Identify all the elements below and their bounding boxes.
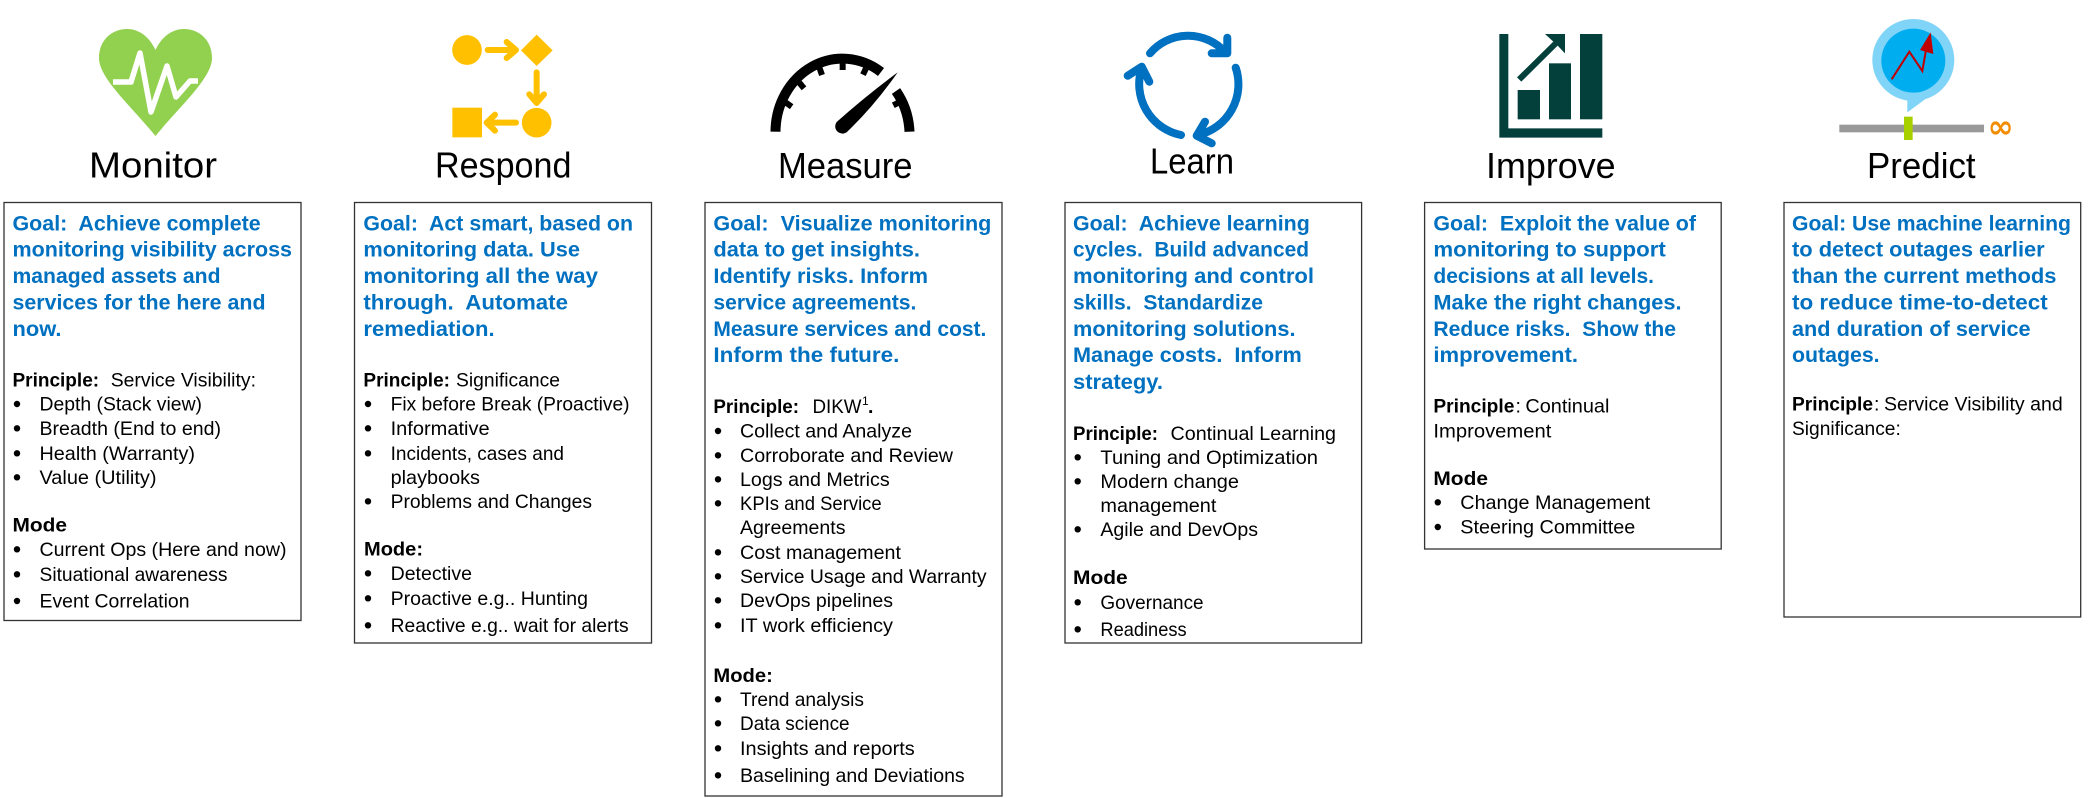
principle: Predict: Service Visibility and: [1884, 394, 2063, 416]
mode list: Learn: Mode: [1073, 567, 1128, 589]
goal text: Improve: improvement.: [1433, 344, 1578, 367]
principle: Predict: [1792, 394, 2063, 440]
goal text: Measure: Inform the future.: [713, 344, 899, 367]
principle list: Learn: management: [1100, 495, 1217, 517]
goal text: Learn: skills. Standardize: [1073, 292, 1263, 315]
icon: prediction bubble on slider: [1839, 19, 2014, 145]
heading: Improve: Improve: [1486, 145, 1616, 186]
mode list: Respond: Detective: [391, 563, 472, 585]
panel: Measure: [705, 202, 1002, 796]
principle list: Measure: IT work efficiency: [740, 615, 893, 637]
principle list: Measure: Service Usage and Warranty: [740, 566, 987, 588]
icon: circular learning arrows: [1128, 36, 1238, 143]
principle list: Respond: Significance: [456, 370, 560, 392]
heading: Measure: Measure: [778, 145, 912, 186]
goal text: Monitor: managed assets and: [12, 265, 220, 288]
heading: Respond: Respond: [435, 145, 571, 186]
principle list: Monitor: Principle:: [12, 370, 99, 392]
principle list: Measure: Principle:: [713, 396, 799, 418]
mode list: Learn: [1073, 567, 1204, 641]
principle list: Monitor: Value (Utility): [40, 467, 156, 489]
goal text: Learn: monitoring solutions.: [1073, 318, 1296, 341]
goal text: Monitor: now.: [12, 318, 61, 341]
mode list: Respond: Proactive e.g.. Hunting: [391, 588, 588, 610]
principle list: Learn: [1073, 423, 1336, 541]
principle list: Monitor: Service Visibility:: [111, 370, 256, 392]
goal text: Monitor: monitoring visibility across: [12, 239, 292, 262]
mode list: Improve: [1433, 468, 1651, 539]
principle list: Respond: playbooks: [391, 467, 480, 489]
goal text: Predict: to reduce time-to-detect: [1792, 292, 2048, 315]
mode list: Respond: [364, 539, 629, 637]
panel: Predict: [1784, 202, 2081, 617]
principle list: Respond: Problems and Changes: [391, 491, 592, 513]
principle: Improve: :: [1516, 396, 1521, 418]
mode list: Monitor: Current Ops (Here and now): [40, 539, 286, 561]
principle list: Monitor: Depth (Stack view): [40, 394, 202, 416]
principle list: Learn: Continual Learning: [1170, 423, 1336, 445]
goal text: Monitor: [12, 213, 292, 341]
goal text: Learn: cycles. Build advanced: [1073, 239, 1309, 262]
icon: rising bar chart: [1499, 34, 1602, 138]
mode list: Monitor: Mode: [12, 515, 67, 537]
goal text: Respond: monitoring all the way: [363, 265, 598, 288]
goal text: Learn: monitoring and control: [1073, 265, 1314, 288]
panel: Learn: [1065, 202, 1362, 643]
mode list: Monitor: [12, 515, 286, 613]
principle list: Measure: DevOps pipelines: [740, 590, 893, 612]
mode list: Learn: Governance: [1100, 592, 1204, 614]
goal text: Improve: Goal: Exploit the value of: [1433, 213, 1697, 236]
icon: heart with pulse: [99, 29, 212, 136]
heading: Monitor: Monitor: [89, 145, 217, 186]
mode list: Measure: Mode:: [713, 665, 773, 687]
mode list: Measure: Baselining and Deviations: [740, 765, 965, 787]
principle list: Respond: Principle:: [363, 370, 450, 392]
panel: Monitor: [4, 202, 301, 620]
goal text: Respond: Goal: Act smart, based on: [363, 213, 633, 236]
goal text: Learn: Goal: Achieve learning: [1073, 213, 1310, 236]
goal text: Learn: Manage costs. Inform: [1073, 344, 1302, 367]
principle list: Respond: Informative: [391, 418, 490, 440]
mode list: Improve: Mode: [1433, 468, 1488, 490]
goal text: Measure: service agreements.: [713, 292, 916, 315]
goal text: Measure: Identify risks. Inform: [713, 265, 928, 288]
principle list: Monitor: [12, 370, 256, 489]
mode list: Respond: Mode:: [364, 539, 423, 561]
goal text: Measure: Measure services and cost.: [713, 318, 986, 341]
goal text: Improve: decisions at all levels.: [1433, 265, 1654, 288]
principle list: Learn: Agile and DevOps: [1100, 519, 1258, 541]
principle list: Measure: 1: [862, 394, 869, 408]
principle list: Respond: Fix before Break (Proactive): [391, 394, 630, 416]
principle list: Measure: DIKW: [812, 396, 862, 418]
mode list: Measure: [713, 665, 965, 787]
principle: Improve: [1433, 396, 1609, 442]
goal text: Predict: Goal: Use machine learning: [1792, 213, 2071, 236]
goal text: Respond: remediation.: [363, 318, 495, 341]
principle: Improve: Improvement: [1433, 420, 1552, 442]
goal text: Respond: monitoring data. Use: [363, 239, 580, 262]
goal text: Improve: monitoring to support: [1433, 239, 1666, 262]
principle list: Learn: Tuning and Optimization: [1100, 447, 1318, 469]
principle: Improve: Principle: [1433, 396, 1515, 418]
principle list: Measure: [713, 394, 987, 637]
mode list: Learn: Readiness: [1100, 619, 1187, 641]
goal text: Predict: outages.: [1792, 344, 1880, 367]
goal text: Improve: [1433, 213, 1697, 367]
principle list: Measure: Logs and Metrics: [740, 469, 890, 491]
goal text: Improve: Reduce risks. Show the: [1433, 318, 1676, 341]
goal text: Learn: [1073, 213, 1314, 394]
mode list: Measure: Insights and reports: [740, 738, 915, 760]
goal text: Respond: [363, 213, 633, 341]
mode list: Monitor: Situational awareness: [40, 564, 228, 586]
mode list: Measure: Trend analysis: [740, 689, 864, 711]
heading: Learn: Learn: [1150, 140, 1234, 181]
mode list: Respond: Reactive e.g.. wait for alerts: [391, 615, 629, 637]
mode list: Improve: Change Management: [1460, 492, 1651, 514]
principle: Improve: Continual: [1525, 396, 1609, 418]
goal text: Predict: to detect outages earlier: [1792, 239, 2045, 262]
principle list: Monitor: Breadth (End to end): [40, 418, 221, 440]
principle list: Measure: Collect and Analyze: [740, 421, 912, 443]
goal text: Predict: than the current methods: [1792, 265, 2056, 288]
mode list: Improve: Steering Committee: [1460, 517, 1635, 539]
principle list: Learn: Modern change: [1100, 471, 1239, 493]
goal text: Measure: data to get insights.: [713, 239, 920, 262]
mode list: Monitor: Event Correlation: [40, 591, 190, 613]
principle list: Measure: .: [868, 396, 873, 418]
panel: Respond: [354, 202, 652, 643]
goal text: Improve: Make the right changes.: [1433, 292, 1682, 315]
principle list: Monitor: Health (Warranty): [40, 443, 195, 465]
goal text: Monitor: Goal: Achieve complete: [12, 213, 261, 236]
principle list: Measure: Corroborate and Review: [740, 445, 954, 467]
goal text: Predict: and duration of service: [1792, 318, 2031, 341]
heading: Predict: Predict: [1867, 145, 1976, 186]
principle list: Measure: Cost management: [740, 542, 902, 564]
principle list: Measure: Agreements: [740, 517, 846, 539]
goal text: Respond: through. Automate: [363, 292, 568, 315]
icon: flow of shapes and arrows: [452, 35, 553, 137]
principle list: Respond: Incidents, cases and: [391, 443, 564, 465]
panel: Improve: [1425, 202, 1721, 549]
goal text: Measure: [713, 213, 991, 367]
goal text: Measure: Goal: Visualize monitoring: [713, 213, 991, 236]
icon: speedometer gauge: [776, 59, 910, 134]
goal text: Monitor: services for the here and: [12, 292, 266, 315]
goal text: Learn: strategy.: [1073, 371, 1163, 394]
principle: Predict: Significance:: [1792, 418, 1901, 440]
goal text: Predict: [1792, 213, 2071, 367]
principle: Predict: :: [1874, 394, 1879, 416]
principle list: Respond: [363, 370, 630, 513]
icon: prediction bubble on slider: ∞: [1988, 107, 2014, 145]
mode list: Measure: Data science: [740, 713, 850, 735]
principle list: Measure: KPIs and Service: [740, 493, 882, 515]
principle list: Learn: Principle:: [1073, 423, 1158, 445]
principle: Predict: Principle: [1792, 394, 1873, 416]
